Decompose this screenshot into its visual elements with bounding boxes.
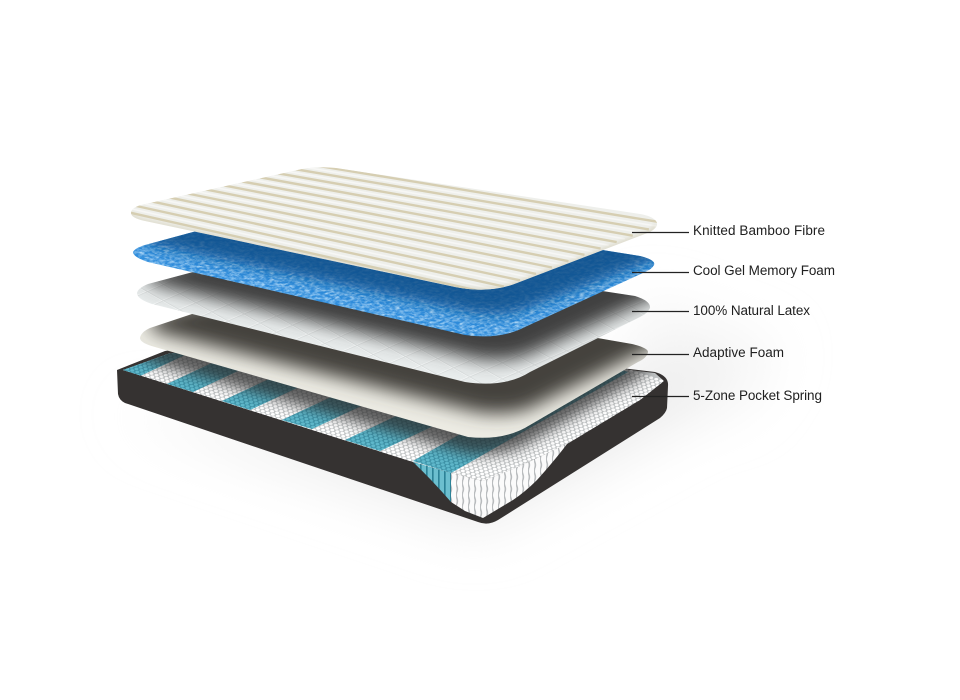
layer: 5-zone pocket spring base bbox=[117, 350, 668, 524]
layer: cool gel memory foam bbox=[133, 232, 654, 336]
floor shadow bbox=[120, 300, 780, 530]
layer: natural latex bbox=[137, 272, 650, 384]
callout: 5-Zone Pocket Spring: 5-Zone Pocket Spring bbox=[693, 388, 822, 403]
infographic: exploded mattress layers bbox=[117, 167, 834, 526]
callout: 100% Natural Latex: 100% Natural Latex bbox=[693, 303, 810, 318]
tan stripes bbox=[117, 164, 665, 293]
callouts bbox=[632, 223, 835, 403]
callout: Cool Gel Memory Foam: Cool Gel Memory Foam bbox=[693, 263, 835, 278]
front rim shading bbox=[131, 213, 656, 290]
cut-away white coil wall bbox=[451, 444, 567, 518]
cut-away teal coil wall bbox=[413, 462, 451, 502]
grey stripes bbox=[126, 166, 657, 290]
layer: knitted bamboo fibre bbox=[117, 164, 665, 293]
spring top surface bbox=[123, 352, 664, 481]
callout: Knitted Bamboo Fibre: Knitted Bamboo Fibre bbox=[693, 223, 825, 238]
callout: Adaptive Foam: Adaptive Foam bbox=[693, 345, 784, 360]
layer: adaptive foam bbox=[140, 314, 648, 438]
dark tray bbox=[117, 330, 668, 524]
